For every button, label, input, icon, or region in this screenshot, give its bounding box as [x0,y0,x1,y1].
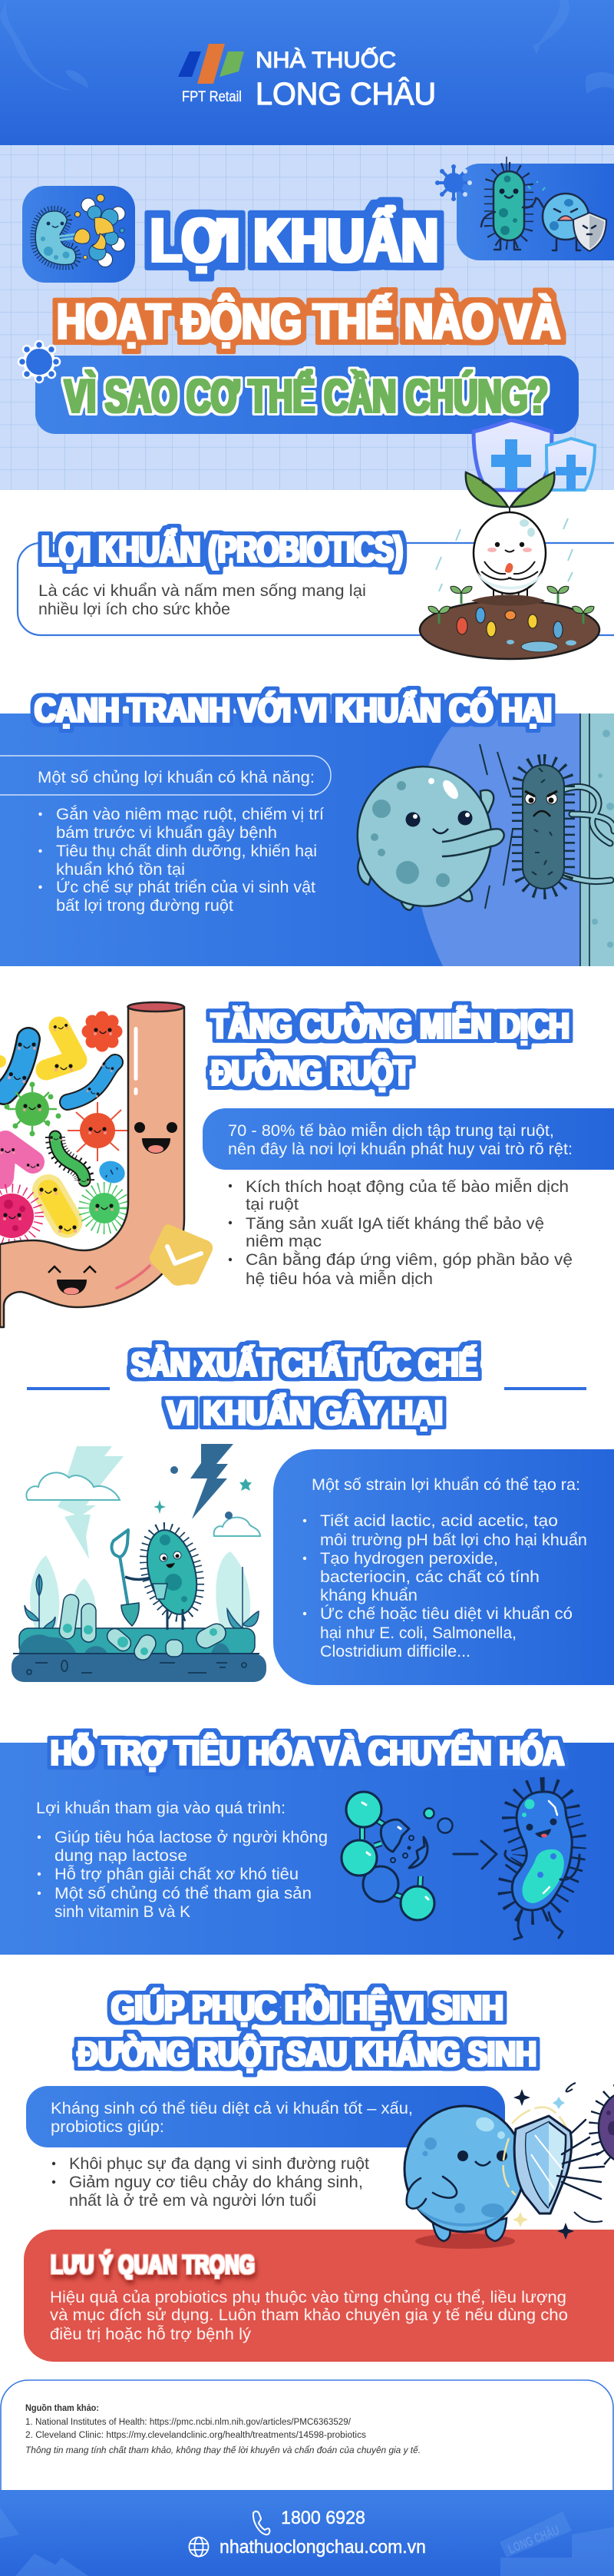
heading: restore flora [78,1988,536,2074]
logo mark: FPT Retail: FPT Retail [182,89,242,105]
icon: phone [253,2511,269,2535]
icon: virus decoration [435,164,472,201]
text: bullet list: khuẩn khó tồn tại [56,861,185,879]
panel: references: Nguồn tham khảo: [25,2404,99,2413]
icon: purple harmful germ [599,2092,614,2163]
illustration: bacterium with shovel [12,1444,266,1682]
panel: hero title on grid [0,145,614,490]
text: bullet list: Gắn vào niêm mạc ruột, chiếm vị trí [56,806,324,823]
header band [0,0,614,145]
text: bullet list: hệ tiêu hóa và miễn dịch [246,1270,433,1288]
text: bullet list: Ức chế sự phát triển của vi sinh vật [56,879,315,896]
text: bullet list: bất lợi trong đường ruột [56,897,233,915]
callout: substances list [273,1449,614,1685]
title bar [35,356,579,434]
callout: important note [24,2230,614,2362]
text: definition [38,582,366,618]
callout: antibiotics: probiotics giúp: [51,2118,164,2136]
logo mark: FPT Retail [178,44,244,105]
logo text: Nhà Thuốc Long Châu: LONG CHÂU [256,76,436,111]
icon panel: bacterium breaking molecule [22,186,135,283]
panel: digestion and metabolism [0,1733,614,1955]
text: definition: Là các vi khuẩn và nấm men sống mang lại [38,582,366,600]
callout: substances list: môi trường pH bất lợi cho hại khuẩn [320,1531,587,1549]
text: bullet list: Tăng sản xuất IgA tiết kháng thể bảo vệ [246,1215,544,1233]
text: definition: nhiều lợi ích cho sức khỏe [38,601,230,618]
callout: immune cell share: 70 - 80% tế bào miễn dịch tập trung tại ruột, [228,1122,554,1140]
panel: inhibitory substances [12,1345,614,1685]
callout: immune cell share [203,1108,614,1170]
callout: substances list: Một số strain lợi khuẩn có thể tạo ra: [312,1476,580,1494]
title line 1: LỢI KHUẨN [150,206,438,276]
watermark: store sign: LONG CHÂU [506,2523,561,2557]
text: bullet list: bám trước vi khuẩn gây bệnh [56,824,277,842]
note text: Hiệu quả của probiotics phụ thuộc vào từng chủng cụ thể, liều lượng [50,2289,566,2306]
illustration: intestine with microbes [0,1002,213,1327]
text: digestion list: sinh vitamin B và K [54,1903,190,1921]
text: bullet list: Tiêu thụ chất dinh dưỡng, khiến hại [56,843,317,860]
callout: substances list: Ức chế hoặc tiêu diệt vi khuẩn có [320,1605,573,1623]
panel: references: 1. National Institutes of Health: https://pmc.ncbi.nlm.nih.gov/articles/PMC6363529/ [25,2418,352,2427]
note text: và mục đích sử dụng. Luôn tham khảo chuyên gia y tế nếu dùng cho [50,2306,568,2324]
text: bullet list: tại ruột [246,1196,299,1214]
panel: definition of probiotics [18,472,614,659]
icon panel: good bacteria high-five [435,157,614,260]
callout: antibiotics: Kháng sinh có thể tiêu diệt cả vi khuẩn tốt – xấu, [51,2100,413,2117]
illustration: wall and harmful bacterium [480,714,614,966]
heading: gut immunity: ĐƯỜNG RUỘT [211,1052,411,1093]
arrow [454,1841,497,1869]
icon: yellow check badge [150,1224,213,1286]
text: bullet list: niêm mạc [246,1233,322,1250]
illustration: molecule being broken down [342,1792,453,1920]
text: benefits list: nhất là ở trẻ em và người lớn tuổi [69,2192,316,2210]
text: digestion list: Giúp tiêu hóa lactose ở người không [54,1829,328,1846]
illustration: blue bacterium with shield [404,2083,614,2249]
callout: immune cell share: nên đây là nơi lợi khuẩn phát huy vai trò rõ rệt: [228,1141,573,1158]
text: digestion list: Hỗ trợ phân giải chất xơ khó tiêu [54,1866,299,1883]
panel: compete with harmful bacteria [0,690,614,966]
note text: điều trị hoặc hỗ trợ bệnh lý [50,2326,252,2343]
heading: inhibitory substances: VI KHUẨN GÂY HẠI [167,1393,443,1432]
heading: inhibitory substances: SẢN XUẤT CHẤT ỨC CHẾ [131,1345,477,1384]
heading: inhibitory substances [27,1345,586,1432]
panel: gut immunity [0,1002,614,1327]
note text [50,2289,568,2343]
icon: virus outline [18,341,60,382]
heading: gut immunity [211,1005,569,1093]
heading: restore flora: GIÚP PHỤC HỒI HỆ VI SINH [111,1988,503,2028]
text: benefits list [52,2155,369,2210]
illustration: seedling character on soil [420,472,599,659]
logo text: Nhà Thuốc Long Châu [256,47,436,111]
callout: substances list: bacteriocin, các chất có tính [320,1568,540,1586]
callout: substances list: hại như E. coli, Salmonella, [320,1624,517,1642]
callout: antibiotics [26,2086,505,2147]
text: benefits list: Giảm nguy cơ tiêu chảy do kháng sinh, [69,2174,363,2191]
callout: substances list: kháng khuẩn [320,1587,418,1604]
text: digestion list: Lợi khuẩn tham gia vào quá trình: [36,1800,286,1817]
contact: phone number: 1800 6928 [281,2508,365,2528]
panel: restore gut flora [24,1988,614,2362]
callout: substances list: Clostridium difficile... [320,1643,470,1660]
germs behind intestine [0,1011,128,1243]
icon: small shield [573,213,606,251]
panel: references: 2. Cleveland Clinic: https://my.clevelandclinic.org/health/treatments/14598-probiotics [25,2431,366,2440]
note heading: LƯU Ý QUAN TRỌNG [51,2250,255,2280]
logo text: Nhà Thuốc Long Châu: NHÀ THUỐC [256,47,396,73]
text: bullet list: Kích thích hoạt động của tế bào miễn dịch [246,1178,569,1196]
footer band [0,2490,614,2576]
contact: website: nhathuoclongchau.com.vn [220,2537,426,2558]
heading: probiotics: LỢI KHUẨN (PROBIOTICS) [41,528,403,571]
text: digestion list: dung nạp lactose [54,1847,187,1865]
callout: intro capsule: Một số chủng lợi khuẩn có khả năng: [38,769,315,786]
panel: references: Thông tin mang tính chất tham khảo, không thay thế lời khuyên và chẩn đoán của chuyên gia y tế. [25,2446,421,2455]
icon: protective shields [474,420,595,490]
illustration: happy bacterium [505,1792,579,1939]
text: bullet list [229,1178,573,1288]
callout: substances list: Tạo hydrogen peroxide, [320,1550,498,1568]
illustration: friendly bacterium pushing [345,754,504,919]
text: digestion list [36,1800,328,1921]
text: bullet list [38,806,324,915]
panel: references [1,2380,613,2490]
text: digestion list: Một số chủng có thể tham gia sản [54,1885,312,1902]
callout: substances list: Tiết acid lactic, acid acetic, tạo [320,1512,558,1530]
text: benefits list: Khôi phục sự đa dạng vi sinh đường ruột [69,2155,369,2173]
text: bullet list: Cân bằng đáp ứng viêm, góp phần bảo vệ [246,1251,573,1269]
callout: intro capsule [0,756,331,795]
icon: globe [189,2538,209,2556]
